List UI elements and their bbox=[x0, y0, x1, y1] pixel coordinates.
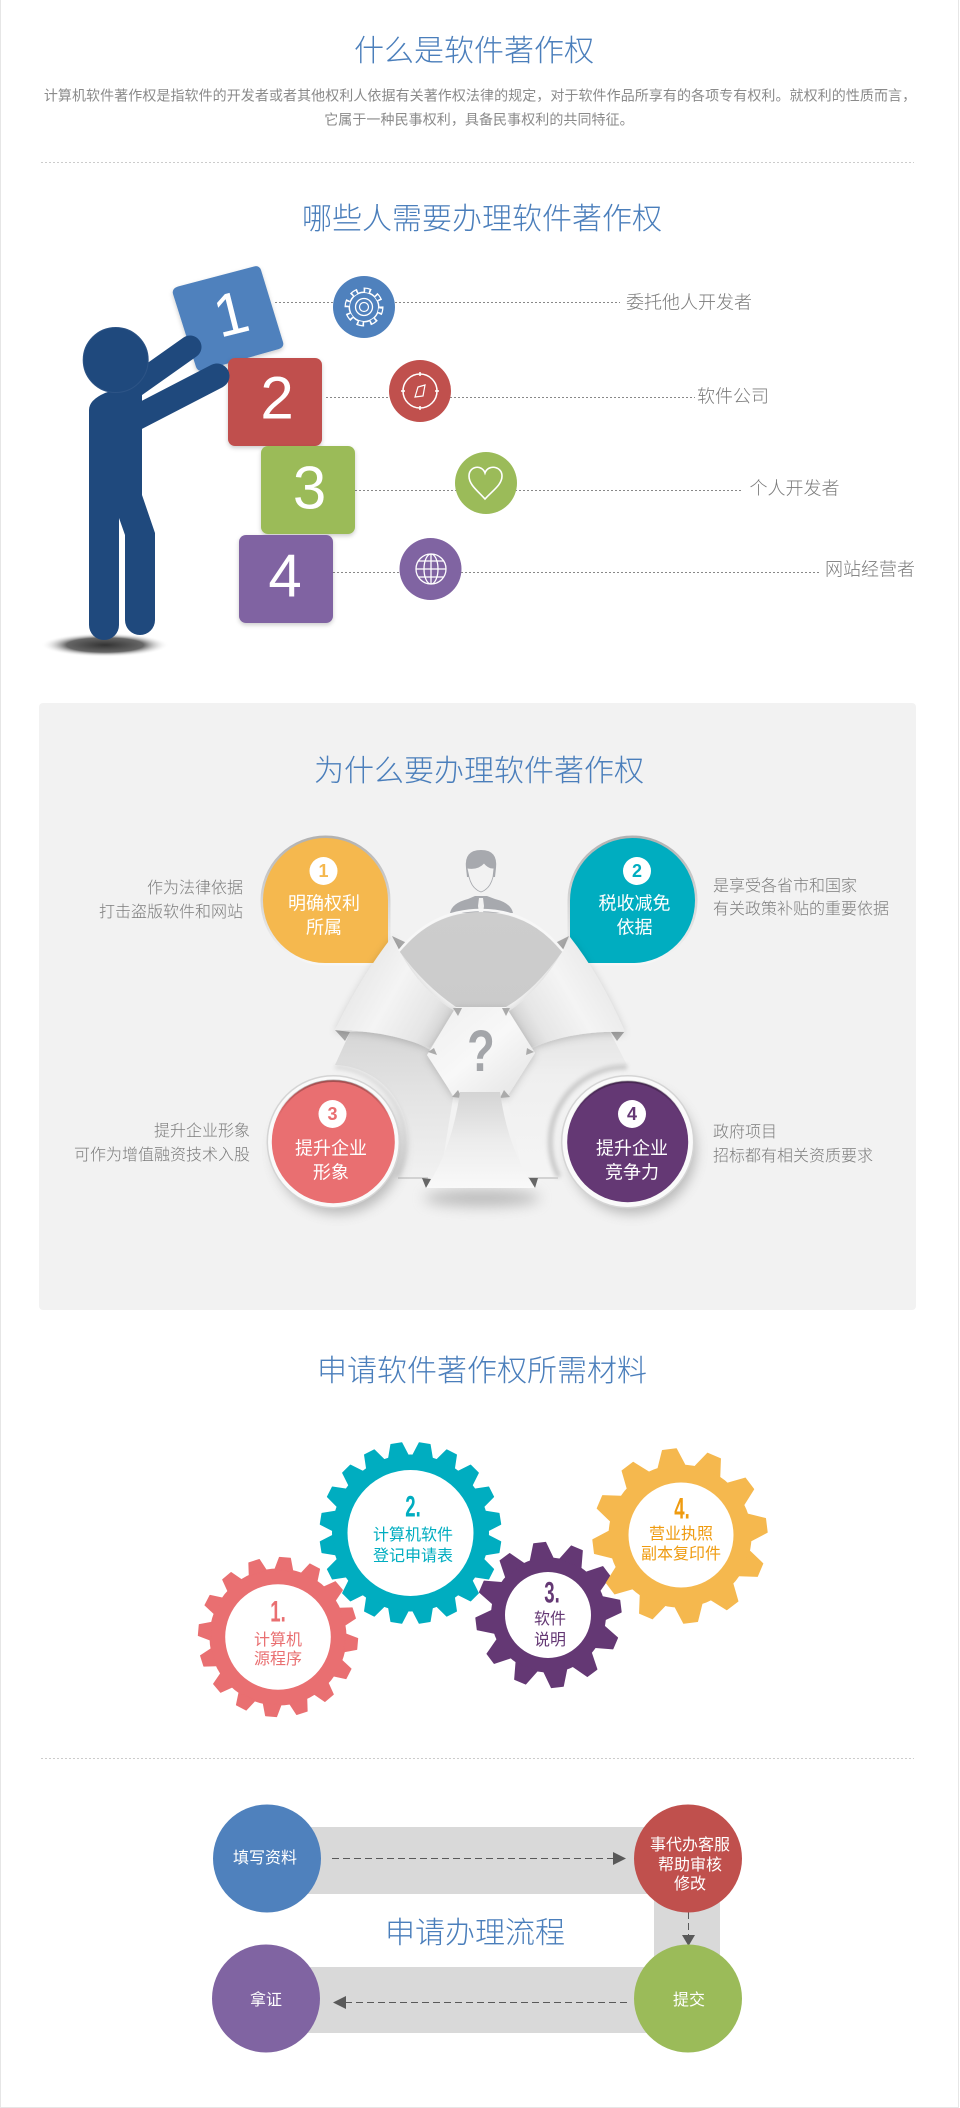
gear 2 bbox=[320, 1442, 501, 1624]
ribbon: upper left bbox=[335, 937, 456, 1048]
circle 3: 提升企业 bbox=[295, 1138, 367, 1158]
block 3: 3 bbox=[293, 454, 326, 522]
title: what is software copyright: 什么是软件著作权 bbox=[354, 35, 594, 68]
circle 3 bbox=[267, 1076, 402, 1214]
icon: gear circle bbox=[333, 276, 395, 338]
ribbon: upper right bbox=[508, 937, 625, 1048]
block 4: 4 bbox=[268, 542, 302, 610]
icon: globe circle bbox=[400, 538, 462, 600]
fold triangles lower bbox=[422, 1008, 538, 1188]
gear 2: 计算机软件 bbox=[373, 1525, 453, 1544]
icon: compass circle bbox=[389, 360, 451, 422]
arrow: submit to certificate bbox=[333, 1996, 627, 2009]
block 2: 2 bbox=[260, 364, 294, 432]
step: fill in: 填写资料 bbox=[233, 1849, 297, 1867]
circle 4 bbox=[562, 1076, 696, 1214]
block 1: 1 bbox=[207, 277, 255, 351]
leader lines bbox=[275, 302, 820, 572]
heading: process: 申请办理流程 bbox=[385, 1917, 565, 1950]
ribbon edge shading bbox=[335, 1067, 627, 1178]
teardrop 2: 2 bbox=[632, 861, 642, 881]
block 3 bbox=[261, 446, 355, 534]
intro text: 计算机软件著作权是指软件的开发者或者其他权利人依据有关著作权法律的规定，对于软件作品所享有的各项专有权利。就权利的性质而言， bbox=[44, 88, 916, 104]
teardrop 2: 依据 bbox=[616, 918, 652, 938]
gear 3: 3. bbox=[544, 1576, 560, 1610]
heading: who needs it: 哪些人需要办理软件著作权 bbox=[302, 203, 662, 236]
callout text 3 bbox=[74, 1122, 250, 1164]
circle 4: 提升企业 bbox=[596, 1138, 668, 1158]
step: review: 修改 bbox=[674, 1875, 706, 1893]
arrow: review to submit bbox=[682, 1912, 695, 1946]
gear 4 bbox=[592, 1448, 768, 1624]
label: website operator: 网站经营者 bbox=[825, 560, 915, 580]
callout text 1 bbox=[99, 879, 243, 921]
callout text 4 bbox=[713, 1123, 873, 1165]
icon: person bbox=[450, 850, 513, 913]
label: entrusted: 委托他人开发者 bbox=[626, 292, 752, 312]
callout text 1: 作为法律依据 bbox=[147, 879, 243, 897]
circle 3: 形象 bbox=[313, 1162, 349, 1182]
step: submit bbox=[634, 1944, 742, 2052]
gear 4: 营业执照 bbox=[649, 1525, 713, 1543]
gear 3: 说明 bbox=[534, 1631, 566, 1649]
callout text 2: 有关政策补贴的重要依据 bbox=[713, 900, 889, 918]
hexagon with question mark: ? bbox=[467, 1020, 495, 1084]
gear 1: 1. bbox=[270, 1595, 286, 1629]
label: software company: 软件公司 bbox=[697, 386, 769, 406]
heading: why: 为什么要办理软件著作权 bbox=[314, 755, 644, 788]
step: fill in bbox=[213, 1804, 321, 1912]
gear 3: 软件 bbox=[534, 1610, 566, 1628]
figure: person lifting blocks bbox=[41, 328, 217, 657]
step: submit: 提交 bbox=[673, 1991, 705, 2009]
gear 3 bbox=[475, 1542, 622, 1688]
arrow: fill to review bbox=[332, 1852, 626, 1865]
fold triangles upper bbox=[335, 936, 625, 1041]
label: individual developer: 个人开发者 bbox=[750, 478, 840, 498]
block 1 bbox=[173, 266, 283, 371]
ribbon: lower left bbox=[335, 1032, 453, 1178]
ribbon: bottom piece bbox=[426, 1092, 535, 1188]
heading: materials: 申请软件著作权所需材料 bbox=[317, 1355, 647, 1388]
teardrop 2: 税收减免 bbox=[598, 894, 670, 914]
gear 1: 源程序 bbox=[254, 1650, 302, 1668]
block 2 bbox=[228, 358, 322, 446]
callout text 2 bbox=[713, 877, 889, 918]
teardrop 2 bbox=[570, 838, 695, 963]
panel: why apply bbox=[39, 703, 916, 1310]
gear 4: 4. bbox=[674, 1492, 690, 1526]
centre: soft shadow bbox=[424, 1190, 540, 1206]
gear 1 bbox=[198, 1557, 358, 1717]
circle 3: 3 bbox=[327, 1104, 338, 1124]
teardrop 1: 明确权利 bbox=[288, 894, 360, 914]
hexagon with question mark bbox=[427, 1007, 535, 1097]
step: review: 帮助审核 bbox=[658, 1856, 722, 1874]
callout text 3: 提升企业形象 bbox=[154, 1122, 250, 1140]
icon: heart circle bbox=[455, 452, 517, 514]
teardrop 1: 所属 bbox=[306, 918, 342, 938]
intro text: 它属于一种民事权利，具备民事权利的共同特征。 bbox=[324, 112, 634, 128]
gear 2: 2. bbox=[405, 1490, 421, 1524]
teardrop 1 bbox=[263, 838, 388, 963]
block 4 bbox=[239, 535, 333, 623]
callout text 3: 可作为增值融资技术入股 bbox=[74, 1146, 250, 1164]
circle 4: 4 bbox=[627, 1104, 637, 1124]
ribbon: lower right bbox=[507, 1032, 627, 1178]
step: certificate: 拿证 bbox=[250, 1990, 282, 2009]
step: review bbox=[634, 1804, 742, 1912]
fan: top segment bbox=[400, 912, 562, 1007]
step: review: 事代办客服 bbox=[650, 1836, 730, 1854]
flow connector bars bbox=[267, 1827, 720, 2033]
callout text 1: 打击盗版软件和网站 bbox=[99, 903, 243, 921]
teardrop 1: 1 bbox=[318, 861, 329, 881]
callout text 4: 政府项目 bbox=[713, 1123, 777, 1141]
step: certificate bbox=[212, 1944, 320, 2052]
gear 1: 计算机 bbox=[254, 1630, 302, 1649]
intro text bbox=[44, 88, 916, 128]
gear 2: 登记申请表 bbox=[373, 1547, 453, 1565]
callout text 2: 是享受各省市和国家 bbox=[713, 877, 857, 895]
gear 4: 副本复印件 bbox=[641, 1545, 721, 1563]
circle 4: 竞争力 bbox=[605, 1162, 659, 1182]
callout text 4: 招标都有相关资质要求 bbox=[713, 1147, 873, 1165]
